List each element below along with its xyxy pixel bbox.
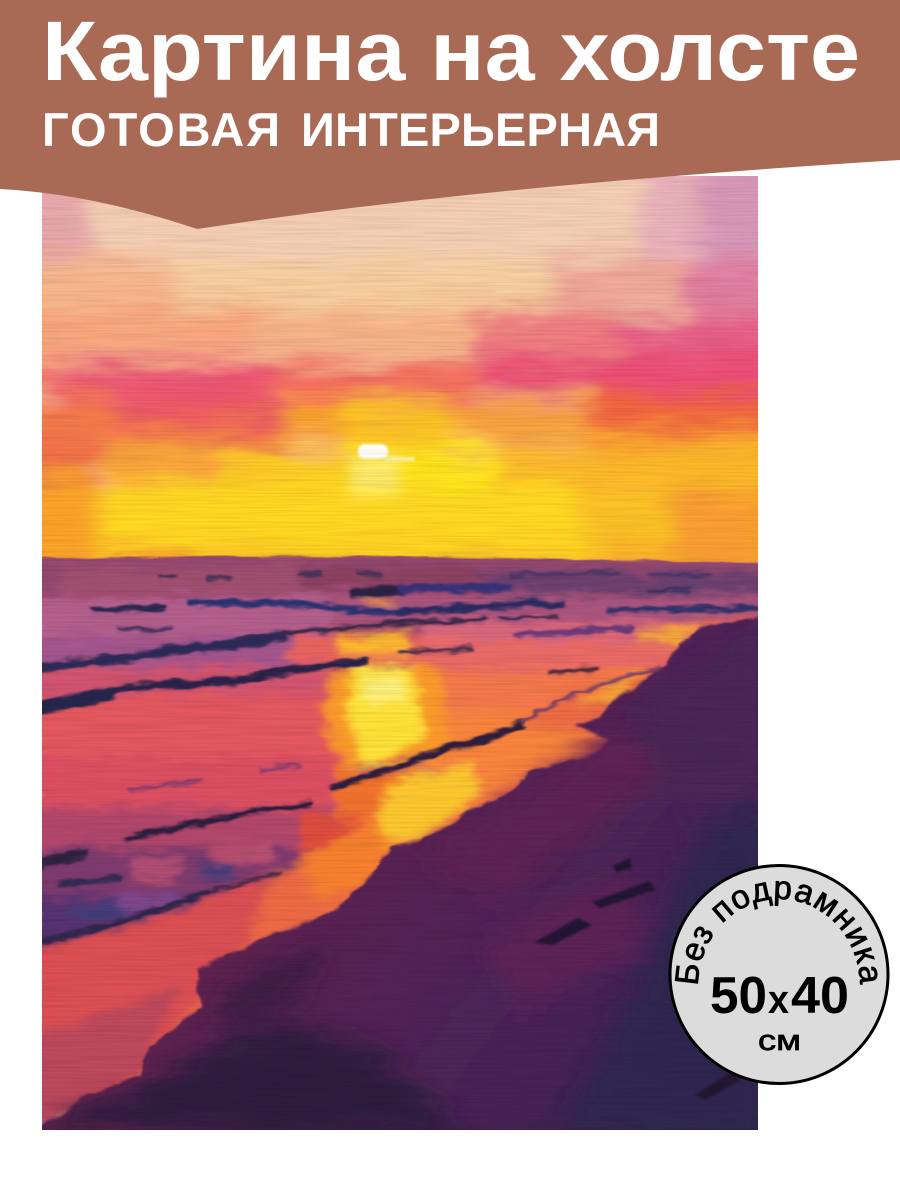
curved label: Без подрамника [674,880,878,985]
sun [350,444,415,495]
wet sand and reflection [30,598,770,1130]
brush texture [42,176,758,1130]
waves [30,573,758,942]
title: Картина на холсте [42,4,860,98]
size: 50 [710,967,767,1025]
size [710,967,849,1025]
banner [0,0,900,229]
size: 40 [791,967,849,1025]
sky [42,176,758,564]
footprints [535,858,740,1100]
painting: sunset over the sea [42,176,758,1130]
beach [30,617,775,1140]
subtitle: ГОТОВАЯ [42,103,280,156]
subtitle: ИНТЕРЬЕРНАЯ [301,103,660,156]
unit: см [758,1025,801,1057]
size: х [768,978,789,1022]
sea [30,556,770,960]
subtitle [42,103,660,156]
badge: canvas size [668,864,890,1085]
